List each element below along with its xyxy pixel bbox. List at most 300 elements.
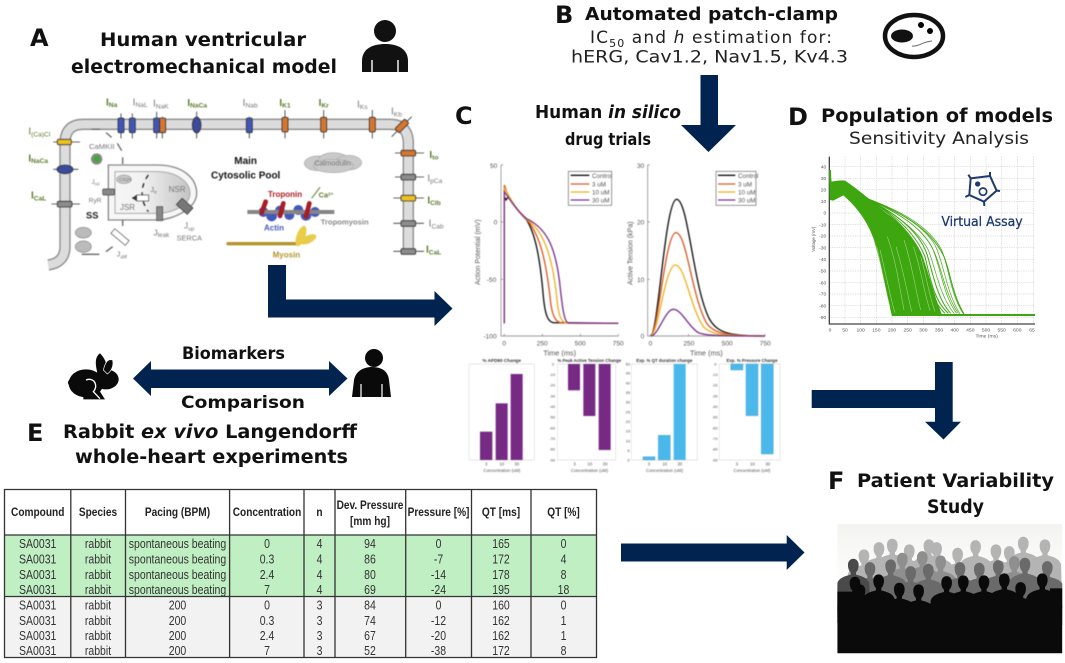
text: IC50 and h estimation: 50	[609, 37, 624, 50]
text: IC50 and h estimation	[571, 28, 848, 68]
ion current labels: I	[427, 195, 430, 206]
ion current labels: I	[427, 173, 430, 184]
column: species: rabbit	[85, 615, 112, 628]
active tension chart: Time (ms)	[690, 348, 723, 357]
bar chart: experimental pressure change: -40	[712, 404, 719, 409]
action potential chart: 50	[490, 163, 498, 170]
bar chart: experimental QT duration change: 40	[626, 380, 631, 385]
plot grid and axes: -60	[819, 280, 827, 286]
heading: human in silico drug trials: drug trials	[565, 130, 651, 150]
ion current labels: I	[106, 97, 109, 108]
sarcoplasmic reticulum: J	[117, 250, 120, 259]
column: developed pressure	[364, 538, 376, 658]
sarcoplasmic reticulum: diff	[120, 254, 128, 260]
sarcoplasmic reticulum: RyR	[89, 198, 102, 205]
bar chart: experimental pressure change: 3	[736, 461, 739, 466]
column: pressure percent: -20	[431, 630, 446, 643]
column: species: rabbit	[85, 554, 112, 567]
sarcoplasmic reticulum: CSQN	[119, 177, 132, 182]
column: compound: SA0031	[19, 538, 56, 551]
bar chart: peak active tension change	[549, 358, 622, 473]
plot grid and axes: -50	[819, 269, 827, 275]
column: compound: SA0031	[19, 630, 56, 643]
plot grid and axes: Time (ms)	[976, 334, 998, 340]
table header: QT [%]	[547, 506, 580, 519]
panel letter B: B	[555, 1, 573, 29]
ion current labels: I	[187, 98, 190, 109]
column: concentration: 0.3	[260, 615, 274, 628]
plot grid and axes: 500	[982, 327, 990, 333]
chart: action potential and active tension	[475, 163, 771, 357]
table: rabbit experiment data	[4, 490, 596, 658]
heading: population of models	[821, 106, 1053, 149]
column: developed pressure: 94	[364, 538, 376, 551]
sarcoplasmic reticulum: J	[153, 227, 158, 237]
column: species	[85, 538, 112, 658]
bar chart: experimental pressure change: -10	[712, 372, 719, 377]
bar chart: experimental QT duration change: 10	[662, 461, 668, 466]
action potential chart: -100	[483, 334, 497, 341]
bar chart: experimental QT duration change: 50	[626, 361, 631, 366]
icon: person small	[352, 349, 391, 397]
plot grid and axes: -90	[819, 315, 827, 321]
bar chart: experimental pressure change: 30	[765, 461, 771, 466]
sarcoplasmic reticulum: CaMKII	[89, 142, 115, 151]
bar chart: APD90 change: % APD90 Change	[482, 358, 521, 363]
action potential chart: Time (ms)	[543, 348, 576, 357]
ion current labels: pCa	[430, 178, 443, 185]
sarcoplasmic reticulum: SS	[86, 210, 98, 220]
column: n: 3	[317, 600, 322, 613]
column: developed pressure: 52	[364, 645, 376, 658]
heading: human ventricular model: electromechanical model	[71, 57, 337, 78]
column: species: rabbit	[85, 600, 112, 613]
text: IC50 and h estimation: and	[625, 28, 673, 48]
plot grid and axes: 30	[821, 176, 827, 182]
sarcoplasmic reticulum: JSR	[120, 203, 135, 212]
column: pressure percent	[431, 538, 447, 658]
arrow: A to C	[268, 265, 452, 326]
bar chart: peak active tension change: -20	[549, 383, 556, 388]
column: n: 4	[317, 584, 323, 597]
column: compound	[19, 538, 56, 658]
myosin	[227, 224, 318, 259]
column: QT ms: 195	[492, 584, 510, 597]
column: n: 3	[317, 645, 322, 658]
plot grid and axes: 350	[935, 327, 943, 333]
bar chart: peak active tension change: -10	[549, 372, 556, 377]
column: compound: SA0031	[19, 569, 56, 582]
plot grid and axes: 10	[821, 199, 827, 205]
bar chart: experimental pressure change: 10	[750, 461, 755, 466]
image: crowd silhouettes	[836, 524, 1065, 653]
table header: Pacing (BPM)	[145, 506, 210, 519]
active tension chart: 10 uM	[738, 189, 756, 196]
column: pressure percent: -12	[431, 615, 446, 628]
bar chart: experimental pressure change: -50	[712, 415, 719, 420]
green traces	[830, 170, 1035, 315]
active tension chart: 30 uM	[738, 197, 756, 204]
column: QT percent: 0	[561, 538, 566, 551]
troponin actin tropomyosin complex: Ca	[319, 191, 328, 200]
column: species: rabbit	[85, 584, 112, 597]
active tension chart: Control	[738, 173, 758, 180]
plot grid and axes: -70	[819, 292, 827, 298]
panel letter A: A	[30, 24, 49, 52]
column: developed pressure: 84	[364, 600, 376, 613]
bar chart: experimental QT duration change: 0	[627, 457, 630, 462]
action potential chart: Control	[592, 173, 612, 180]
heading: population of models: Population of models	[821, 106, 1053, 127]
bar chart: experimental pressure change: -30	[712, 393, 719, 398]
column: QT percent: 1	[561, 630, 566, 643]
bar chart: experimental pressure change: -20	[712, 383, 719, 388]
bar chart: experimental QT duration change: 45	[626, 371, 631, 376]
text: IC50 and h estimation: h estimation for:	[674, 28, 832, 48]
column: compound: SA0031	[19, 584, 56, 597]
bar chart: APD90 change: 3	[485, 461, 488, 466]
active tension chart: 20	[637, 220, 645, 227]
action potential chart: 500	[575, 340, 586, 347]
ion current labels: to	[432, 155, 438, 162]
sarcoplasmic reticulum: J	[92, 180, 95, 186]
action potential chart: -50	[487, 277, 497, 284]
heading: rabbit ex vivo langendorff: whole-heart experiments	[75, 447, 348, 468]
arrow: B to C	[681, 75, 736, 152]
sarcoplasmic reticulum: up	[188, 226, 194, 232]
column: concentration	[260, 538, 275, 658]
troponin actin tropomyosin complex: Actin	[264, 224, 284, 233]
ion current labels: NaCa	[31, 158, 48, 165]
arrow: D to F	[812, 362, 961, 440]
ion current labels: I	[357, 99, 360, 110]
heading: human in silico drug trials: Human in silico	[535, 102, 681, 123]
column: QT ms: 162	[492, 615, 510, 628]
column: species: rabbit	[85, 569, 112, 582]
plot grid and axes: 300	[919, 327, 928, 333]
text: IC50 and h estimation: hERG, Cav1.2, Nav1.5, Kv4.3	[571, 48, 848, 68]
bar chart: experimental QT duration change: 5	[627, 448, 630, 453]
column: pressure percent: -24	[431, 584, 447, 597]
bar chart: peak active tension change: -70	[549, 436, 556, 441]
table header	[11, 499, 580, 528]
ion current labels: I	[426, 245, 429, 256]
heading: patient variability study: Patient Variability	[857, 471, 1054, 492]
bar chart: APD90 change: Concentration (uM)	[483, 468, 521, 473]
ion channels	[52, 110, 424, 254]
plot grid and axes	[811, 157, 1035, 340]
column: QT ms: 178	[492, 569, 510, 582]
column: pacing: spontaneous beating	[129, 538, 226, 551]
bar chart: experimental pressure change	[712, 358, 780, 473]
ion current labels: NaCa	[190, 103, 207, 110]
column: concentration: 2.4	[260, 569, 275, 582]
table header: Dev. Pressure	[337, 499, 403, 512]
heading: automated patch-clamp: Automated patch-clamp	[585, 5, 838, 25]
bar chart: APD90 change	[469, 358, 534, 473]
column: QT ms: 162	[492, 630, 510, 643]
bar chart: peak active tension change: 0	[552, 361, 555, 366]
bar chart: experimental QT duration change: 20	[626, 419, 631, 424]
bar chart: APD90 change: 30	[514, 461, 520, 466]
column: n: 4	[317, 554, 323, 567]
logo: virtual assay	[941, 172, 1023, 230]
plot grid and axes: 150	[872, 327, 881, 333]
column: concentration: 7	[264, 645, 270, 658]
chart: population action potentials	[811, 157, 1035, 340]
column: QT ms: 172	[492, 645, 510, 658]
column: pressure percent: 0	[436, 600, 441, 613]
ion current labels: I	[279, 98, 282, 109]
double arrow	[133, 361, 348, 396]
column: n: 4	[317, 569, 323, 582]
active tension chart: 0	[649, 340, 653, 347]
column: pressure percent: -38	[431, 645, 446, 658]
column: QT percent: 0	[561, 600, 566, 613]
bar chart: experimental QT duration change: 15	[626, 429, 631, 434]
heading: rabbit ex vivo langendorff	[63, 422, 358, 468]
sarcoplasmic reticulum: tr	[154, 189, 157, 195]
action potential chart: 10 uM	[592, 189, 610, 196]
column: pressure percent: 0	[436, 538, 441, 551]
plot grid and axes: 200	[888, 327, 896, 333]
troponin actin tropomyosin complex: Troponin	[268, 190, 302, 199]
column: species: rabbit	[85, 630, 112, 643]
column: concentration: 0	[264, 538, 270, 551]
bar chart: experimental pressure change: Exp. % Pressure Change	[726, 358, 778, 363]
action potential chart: 0	[502, 340, 506, 347]
icon: person	[362, 20, 408, 72]
troponin actin tropomyosin complex: 2+	[328, 191, 334, 196]
action potential chart	[475, 163, 624, 357]
label: main cytosolic pool: Main	[234, 156, 257, 167]
column: species: rabbit	[85, 538, 112, 551]
column: pressure percent: -7	[434, 554, 443, 567]
table header: [mm hg]	[350, 515, 390, 528]
bar chart: experimental QT duration change: 3	[648, 461, 651, 466]
bar chart: experimental pressure change: -60	[712, 425, 719, 430]
plot grid and axes: 20	[821, 187, 827, 193]
table header: Concentration	[233, 506, 301, 519]
bar chart: peak active tension change: -80	[549, 447, 556, 452]
ion current labels: CaL	[429, 249, 441, 256]
heading: population of models: Sensitivity Analysis	[849, 129, 1029, 149]
heading: biomarkers: Biomarkers	[182, 344, 285, 364]
action potential chart: 30 uM	[592, 197, 610, 204]
column: pacing	[129, 538, 226, 658]
column: pacing: spontaneous beating	[129, 584, 226, 597]
heading: human ventricular model: Human ventricular	[100, 30, 307, 51]
column: concentration: 7	[264, 584, 270, 597]
ion current labels	[28, 97, 444, 256]
column: compound: SA0031	[19, 615, 56, 628]
sarcoplasmic reticulum: leak	[158, 232, 170, 239]
ion current labels: I	[243, 98, 245, 109]
bar chart: experimental QT duration change: Exp. % QT duration change	[636, 358, 693, 363]
heading: rabbit ex vivo langendorff: Rabbit ex vivo Langendorff	[63, 422, 358, 443]
ion current labels: Ks	[360, 104, 368, 111]
column: developed pressure: 86	[364, 554, 376, 567]
column: n: 4	[317, 538, 323, 551]
column: pacing: 200	[169, 615, 186, 628]
column: compound: SA0031	[19, 600, 56, 613]
bar chart: peak active tension change: Concentration (uM)	[571, 468, 609, 473]
bar chart: experimental QT duration change: 35	[626, 390, 631, 395]
plot grid and axes: -20	[819, 234, 827, 240]
bar chart: peak active tension change: -60	[549, 425, 556, 430]
bar chart: experimental pressure change: 0	[714, 361, 717, 366]
column: developed pressure: 74	[364, 615, 376, 628]
column: QT percent: 1	[561, 615, 566, 628]
active tension chart: 30	[637, 163, 645, 170]
ion current labels: I	[153, 99, 156, 110]
ion current labels: (Ca)Cl	[31, 131, 51, 138]
troponin actin tropomyosin complex: Tropomyosin	[321, 218, 369, 227]
active tension chart: 500	[722, 340, 733, 347]
heading: human ventricular model	[71, 30, 337, 78]
ion current labels: K1	[282, 103, 291, 110]
column: pacing: spontaneous beating	[129, 569, 226, 582]
active tension chart: 0	[641, 334, 645, 341]
ion current labels: NaK	[156, 103, 169, 110]
column: pressure percent: -14	[431, 569, 447, 582]
column: developed pressure: 80	[364, 569, 376, 582]
table header: n	[316, 506, 323, 519]
action potential chart: 0	[494, 220, 498, 227]
logo: virtual assay: Virtual Assay	[941, 215, 1023, 230]
sarcoplasmic reticulum	[75, 129, 202, 260]
action potential chart: 750	[613, 340, 624, 347]
action potential chart: Action Potential (mV)	[475, 219, 482, 285]
plot grid and axes: 450	[966, 327, 975, 333]
bar chart: experimental QT duration change: 25	[626, 409, 631, 414]
ion current labels: NaL	[135, 102, 148, 109]
table header: Compound	[11, 506, 64, 519]
column: pacing: 200	[169, 645, 186, 658]
panel letter D: D	[788, 103, 808, 131]
heading: patient variability study: Study	[927, 497, 984, 518]
heading: patient variability study	[857, 471, 1054, 518]
ion current labels: I	[429, 150, 432, 161]
plot grid and axes: 0	[829, 327, 832, 333]
sarcoplasmic reticulum: NSR	[169, 185, 186, 194]
column: concentration: 0	[264, 600, 270, 613]
bar chart: experimental pressure change: Concentration (uM)	[733, 468, 771, 473]
bar chart: peak active tension change: -90	[549, 457, 556, 462]
plot grid and axes: -40	[819, 257, 827, 263]
ion current labels: I	[391, 107, 394, 118]
bar chart: peak active tension change: 30	[603, 461, 608, 466]
column: QT ms	[492, 538, 510, 658]
sarcoplasmic reticulum: rel	[95, 181, 100, 186]
ion current labels: Cab	[431, 223, 444, 230]
column: QT percent: 8	[561, 645, 566, 658]
column: pacing: 200	[169, 630, 186, 643]
bar chart: experimental QT duration change: 30	[677, 461, 683, 466]
action potential chart: 3 uM	[592, 181, 606, 188]
column: species: rabbit	[85, 645, 112, 658]
sarcoplasmic reticulum: J	[184, 222, 188, 231]
plot grid and axes: -80	[819, 303, 827, 309]
label: main cytosolic pool: Cytosolic Pool	[211, 171, 281, 182]
text: comparison: Comparison	[181, 393, 305, 413]
plot grid and axes: 65	[1029, 327, 1035, 333]
ion current labels: I	[429, 219, 431, 230]
column: QT percent	[558, 538, 569, 658]
charts: percent change bars	[469, 358, 780, 473]
bar chart: experimental pressure change: -90	[712, 457, 719, 462]
column: developed pressure: 69	[364, 584, 376, 597]
plot grid and axes: 40	[821, 164, 827, 170]
cell membrane	[48, 124, 408, 265]
column: n	[317, 538, 323, 658]
plot grid and axes: Voltage (mV)	[811, 226, 816, 252]
column: QT percent: 4	[561, 554, 567, 567]
heading: human in silico drug trials	[535, 102, 681, 150]
plot grid and axes: 0	[824, 211, 827, 217]
active tension chart: 250	[683, 340, 695, 347]
ion current labels: Clb	[430, 200, 441, 207]
ion current labels: CaL	[34, 195, 46, 202]
ion current labels: Kr	[321, 103, 329, 110]
bar chart: experimental QT duration change: 10	[626, 438, 631, 443]
plot grid and axes: -10	[819, 222, 827, 228]
active tension chart: 3 uM	[738, 181, 752, 188]
column: compound: SA0031	[19, 645, 56, 658]
troponin actin tropomyosin complex	[247, 187, 369, 233]
table header: QT [ms]	[482, 506, 520, 519]
active tension chart: 10	[637, 277, 645, 284]
bar chart: experimental QT duration change: Concentration (uM)	[646, 468, 684, 473]
column: QT ms: 172	[492, 554, 510, 567]
ion current labels: I	[133, 97, 135, 108]
calmodulin cloud	[304, 153, 362, 173]
label: main cytosolic pool	[211, 156, 281, 182]
plot grid and axes: 400	[951, 327, 959, 333]
column: pacing: spontaneous beating	[129, 554, 226, 567]
calmodulin cloud: Calmodulin	[314, 159, 351, 168]
active tension chart: Active Tension (kPa)	[628, 221, 635, 285]
column: compound: SA0031	[19, 554, 56, 567]
active tension chart	[628, 163, 771, 357]
ion current labels: Nab	[245, 103, 258, 110]
ion current labels: I	[28, 127, 31, 138]
bar chart: experimental pressure change: -80	[712, 447, 719, 452]
bar chart: peak active tension change: 10	[587, 461, 593, 466]
column: QT percent: 18	[558, 584, 569, 597]
ion current labels: Na	[109, 102, 118, 109]
column: QT ms: 165	[492, 538, 510, 551]
bar chart: peak active tension change: 3	[573, 461, 576, 466]
text: IC50 and h estimation: IC	[590, 28, 608, 48]
ion current labels: I	[319, 98, 321, 109]
action potential chart: 250	[537, 340, 548, 347]
column: pacing: 200	[169, 600, 186, 613]
plot grid and axes: 250	[904, 327, 912, 333]
bar chart: peak active tension change: % Peak Active Tension Change	[557, 358, 622, 363]
column: QT percent: 8	[561, 569, 566, 582]
plot grid and axes: 600	[1013, 327, 1022, 333]
column: concentration: 0.3	[260, 554, 274, 567]
panel letter E: E	[27, 419, 43, 447]
plot grid and axes: -30	[819, 245, 827, 251]
bar chart: peak active tension change: -40	[549, 404, 556, 409]
column: concentration: 2.4	[260, 630, 275, 643]
bar chart: experimental QT duration change: 30	[626, 400, 631, 405]
sarcoplasmic reticulum: SERCA	[177, 234, 202, 243]
bar chart: APD90 change: 10	[499, 461, 505, 466]
bar chart: peak active tension change: -50	[549, 415, 556, 420]
